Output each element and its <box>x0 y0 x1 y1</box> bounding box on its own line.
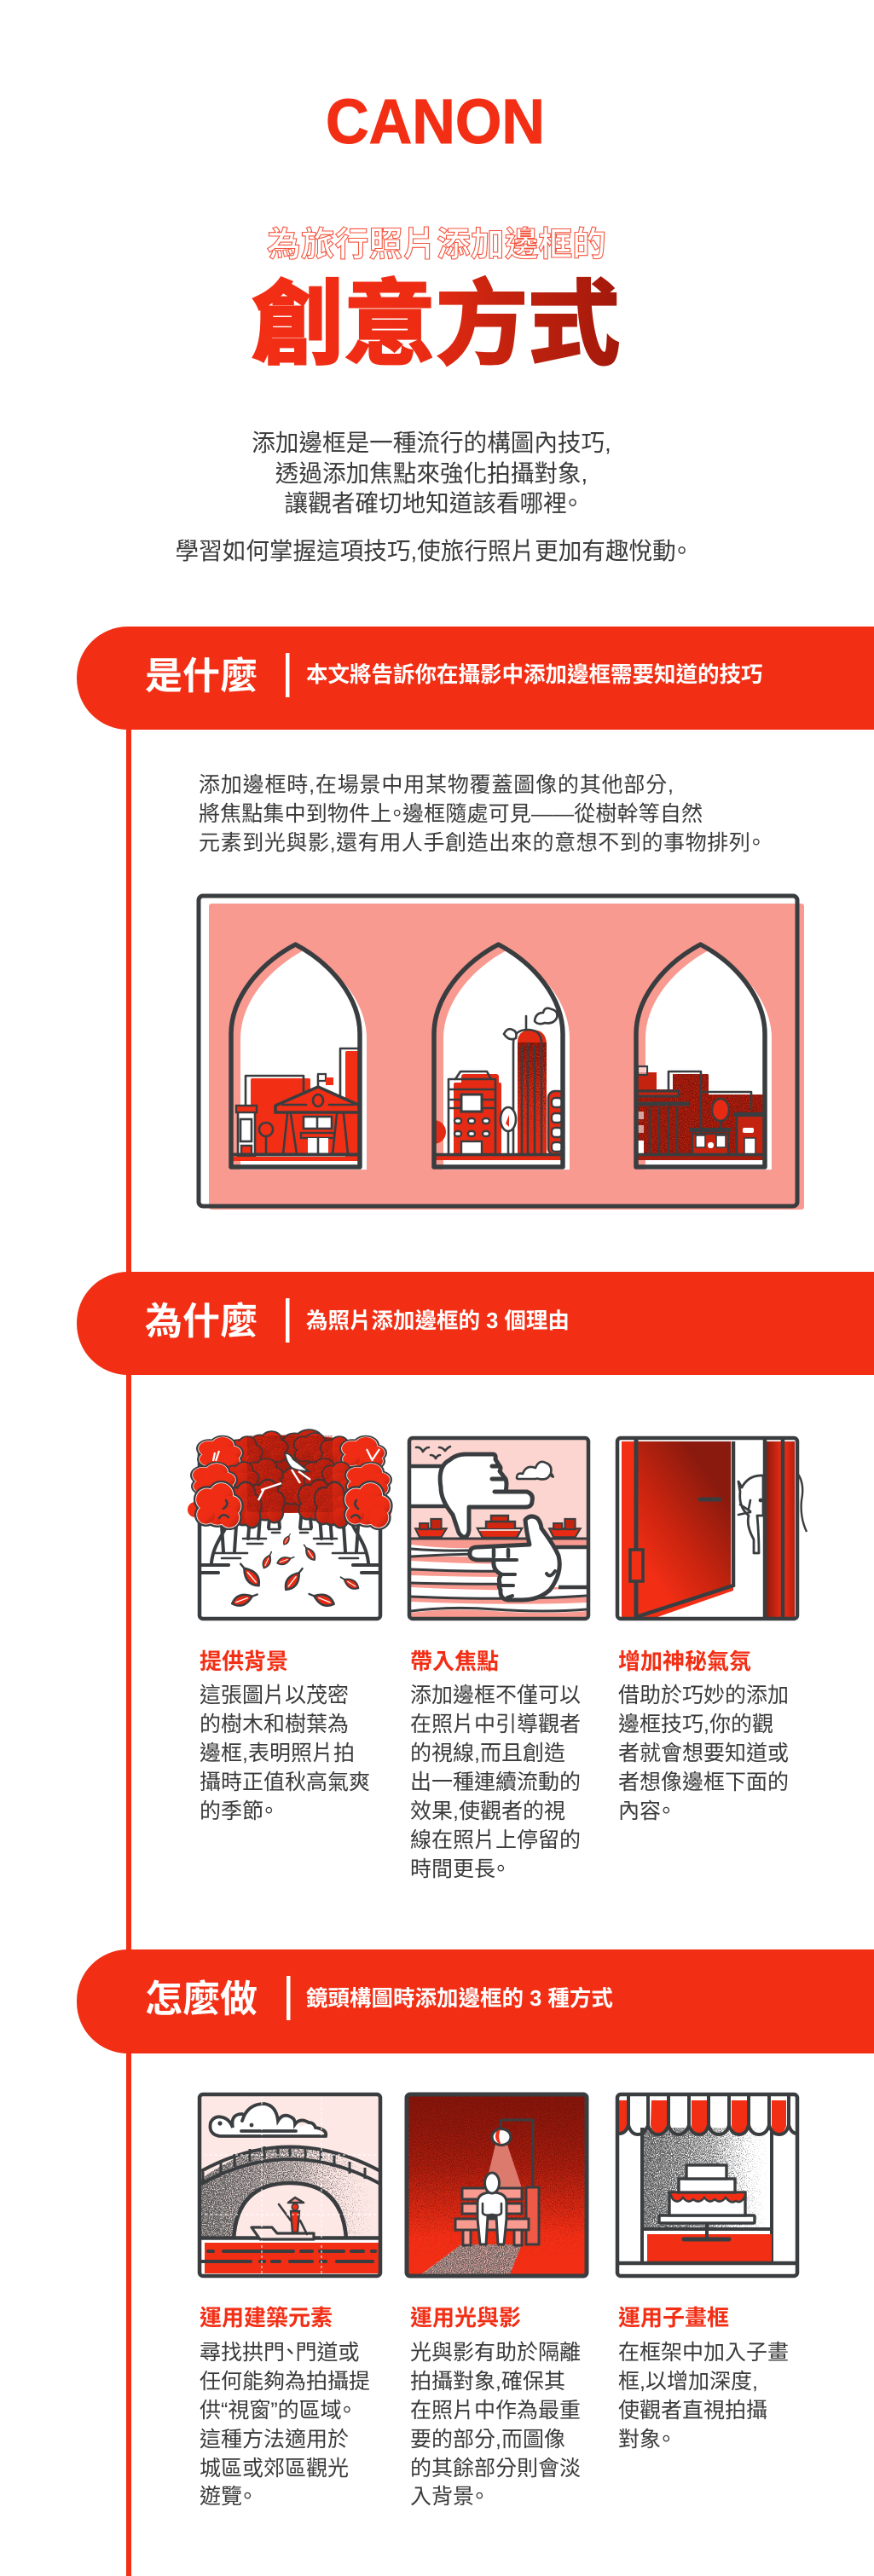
text: what paragraph <box>199 773 761 855</box>
card text: architecture: 城區或郊區觀光 <box>200 2457 349 2481</box>
text: what paragraph: 元素到光與影,還有用人手創造出來的意想不到的事物排列。 <box>199 831 761 855</box>
intro text: 學習如何掌握這項技巧,使旅行照片更加有趣悅動。 <box>176 538 687 564</box>
card text: light and shadow: 拍攝對象,確保其 <box>410 2370 565 2394</box>
illustration: cake in shop window <box>617 2094 797 2276</box>
card text: mystery: 者就會想要知道或 <box>618 1741 789 1765</box>
banner: why: 為什麼 <box>145 1301 258 1343</box>
card text: focus: 在照片中引導觀者 <box>410 1713 581 1736</box>
card text: mystery: 借助於巧妙的添加 <box>618 1684 789 1707</box>
card text: architecture: 尋找拱門、門道或 <box>200 2341 360 2365</box>
intro text: 讓觀者確切地知道該看哪裡。 <box>285 490 578 517</box>
banner: what <box>77 627 874 730</box>
card text: sub-frame: 在框架中加入子畫 <box>618 2341 789 2365</box>
card text: architecture: 遊覽。 <box>200 2485 253 2509</box>
card text: background: 這張圖片以茂密 <box>200 1684 349 1707</box>
card text: focus: 帶入焦點 <box>410 1649 499 1674</box>
banner: how: 鏡頭構圖時添加邊框的 3 種方式 <box>306 1986 613 2011</box>
card text: architecture: 這種方法適用於 <box>200 2428 349 2452</box>
logo: Canon: CANON <box>326 86 545 157</box>
illustration: hands framing a ship <box>409 1438 588 1619</box>
card text: sub-frame: 對象。 <box>618 2428 672 2452</box>
card text: focus <box>410 1649 581 1881</box>
window 2 <box>422 944 570 1170</box>
card text: mystery: 增加神秘氣氛 <box>618 1649 751 1674</box>
text: what paragraph: 將焦點集中到物件上。邊框隨處可見——從樹幹等自然 <box>199 802 703 826</box>
card text: background: 的樹木和樹葉為 <box>200 1713 349 1736</box>
illustration: autumn trees and leaves <box>188 1430 392 1619</box>
text: what paragraph: 添加邊框時,在場景中用某物覆蓋圖像的其他部分, <box>199 773 674 797</box>
card text: focus: 添加邊框不僅可以 <box>410 1684 581 1707</box>
card text: mystery <box>618 1649 789 1823</box>
illustration: three arched windows over city <box>199 896 804 1210</box>
card text: sub-frame: 框,以增加深度, <box>618 2370 758 2394</box>
illustration: open door with cat <box>617 1438 807 1619</box>
card text: mystery: 內容。 <box>618 1799 672 1823</box>
illustration: bridge and boatman <box>200 2094 380 2276</box>
illustration: man on bench under spotlight <box>407 2094 587 2276</box>
card text: light and shadow: 要的部分,而圖像 <box>410 2428 565 2452</box>
intro text <box>176 430 687 564</box>
intro text: 透過添加焦點來強化拍攝對象, <box>275 460 587 487</box>
card text: sub-frame: 運用子畫框 <box>618 2305 729 2331</box>
card text: mystery: 者想像邊框下面的 <box>618 1770 789 1794</box>
card text: focus: 時間更長。 <box>410 1857 506 1881</box>
card text: light and shadow <box>410 2305 581 2509</box>
title: main heading: 創意方式 <box>252 273 620 376</box>
intro text: 添加邊框是一種流行的構圖內技巧, <box>252 430 611 456</box>
card text: light and shadow: 在照片中作為最重 <box>410 2399 581 2423</box>
card text: background: 的季節。 <box>200 1799 275 1823</box>
card text: light and shadow: 入背景。 <box>410 2485 485 2509</box>
card text: architecture: 運用建築元素 <box>200 2305 333 2331</box>
window 3 <box>636 944 772 1170</box>
title: outlined subtitle: 為旅行照片添加邊框的 <box>267 226 606 263</box>
banner: what: 是什麼 <box>145 656 258 697</box>
card text: focus: 出一種連續流動的 <box>410 1770 581 1794</box>
card text: architecture: 供“視窗”的區域。 <box>200 2399 352 2423</box>
window 1 <box>231 944 367 1170</box>
card text: mystery: 邊框技巧,你的觀 <box>618 1713 773 1736</box>
card text: light and shadow: 光與影有助於隔離 <box>410 2341 581 2365</box>
card text: sub-frame: 使觀者直視拍攝 <box>618 2399 767 2423</box>
banner: what: 本文將告訴你在攝影中添加邊框需要知道的技巧 <box>306 663 763 687</box>
card text: background <box>200 1649 370 1823</box>
card text: light and shadow: 的其餘部分則會淡 <box>410 2457 581 2481</box>
card text: focus: 線在照片上停留的 <box>410 1828 581 1852</box>
banner: why <box>77 1272 874 1375</box>
card text: background: 邊框,表明照片拍 <box>200 1741 355 1765</box>
card text: architecture <box>200 2305 370 2509</box>
banner: why: 為照片添加邊框的 3 個理由 <box>306 1309 570 1333</box>
banner: how: 怎麼做 <box>145 1978 258 2020</box>
card text: focus: 的視線,而且創造 <box>410 1741 565 1765</box>
banner: how <box>77 1949 874 2053</box>
card text: focus: 效果,使觀者的視 <box>410 1799 565 1823</box>
card text: light and shadow: 運用光與影 <box>410 2305 521 2331</box>
timeline line <box>126 682 131 2576</box>
card text: background: 攝時正值秋高氣爽 <box>200 1770 370 1794</box>
card text: background: 提供背景 <box>200 1649 288 1674</box>
card text: sub-frame <box>618 2305 789 2452</box>
card text: architecture: 任何能夠為拍攝提 <box>200 2370 370 2394</box>
